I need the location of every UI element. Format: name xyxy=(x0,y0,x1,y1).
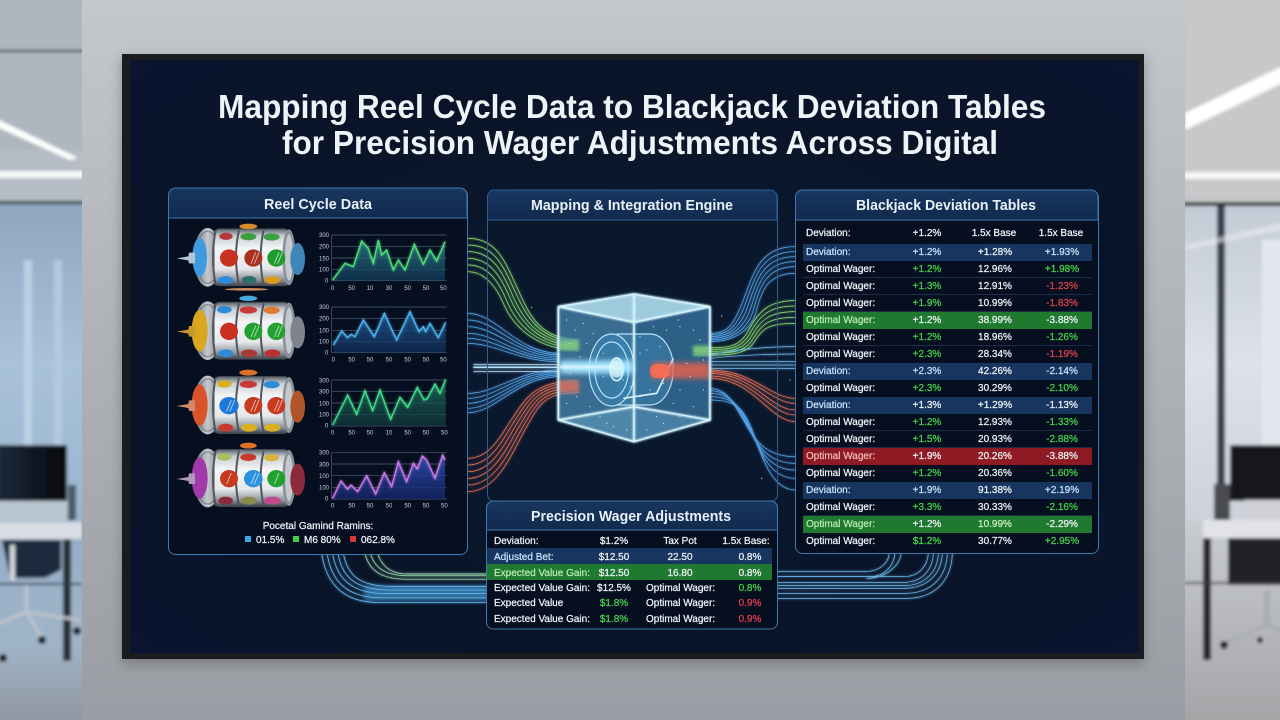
row 1: Deviation: xyxy=(806,247,850,258)
chart legend xyxy=(245,521,395,546)
row 6 xyxy=(806,332,1078,343)
panel: reel cycle data xyxy=(168,188,468,554)
row dividers xyxy=(803,278,1092,516)
row 10: -1.13% xyxy=(1046,400,1078,411)
panel: precision wager adjustments xyxy=(486,501,778,629)
panel: mapping and integration engine xyxy=(488,190,778,502)
line chart 4: 100 xyxy=(319,486,330,492)
title: Mapping Reel Cycle Data to Blackjack Deviation Tables xyxy=(218,88,1046,125)
row 8: Deviation: xyxy=(806,366,850,377)
adjustments header xyxy=(486,501,778,530)
row 12: 20.93% xyxy=(978,434,1012,445)
line chart 2: 50 xyxy=(404,358,412,364)
line chart 2: 200 xyxy=(319,316,330,322)
row 1 xyxy=(803,244,1092,261)
green connector left xyxy=(364,551,487,579)
row 13 highlighted red: -3.88% xyxy=(1046,451,1078,462)
line chart 4: 50 xyxy=(441,504,448,510)
line chart 1: 100 xyxy=(319,268,330,274)
row 11 xyxy=(806,417,1078,428)
chart legend: Pocetal Gamind Ramins: xyxy=(263,521,373,532)
blue inbound data bundle xyxy=(468,313,560,413)
row 4 xyxy=(806,298,1078,309)
line chart 3: 300 xyxy=(319,378,330,384)
line chart 1: 50 xyxy=(440,286,447,292)
adjusted bet row: $12.50 xyxy=(599,552,630,563)
panel: blackjack deviation tables xyxy=(796,190,1098,554)
adjustments column headings: Deviation: xyxy=(494,536,538,547)
line chart 3: 50 xyxy=(404,430,412,436)
adjusted bet row: 22.50 xyxy=(667,552,693,563)
row 12: +1.5% xyxy=(913,434,941,445)
line chart 4: 50 xyxy=(367,504,374,510)
row 3: +1.3% xyxy=(913,281,941,292)
row 5 highlighted green: Optimal Wager: xyxy=(806,315,875,326)
adjustments column headings xyxy=(494,536,770,547)
row 6: 18.96% xyxy=(978,332,1012,343)
row 12 xyxy=(806,434,1078,445)
icon: slot reel 3 xyxy=(177,370,305,434)
cylinder core xyxy=(589,334,673,406)
glow band behind connector xyxy=(364,586,487,601)
row 14: Optimal Wager: xyxy=(806,468,875,479)
energy beams xyxy=(558,341,710,393)
expected value row: Expected Value Gain: xyxy=(494,583,590,594)
line chart 1: 30 xyxy=(386,286,393,292)
row 16: -2.16% xyxy=(1046,502,1078,513)
line chart 4: 50 xyxy=(404,504,412,510)
central inbound beam xyxy=(473,364,560,372)
line chart 3 xyxy=(319,378,448,436)
line chart 2: 300 xyxy=(319,305,330,311)
title: for Precision Wager Adjustments Across Digital xyxy=(282,124,998,161)
row 11: -1.33% xyxy=(1046,417,1078,428)
row 10 xyxy=(803,397,1092,414)
expected value short row: $1.8% xyxy=(600,598,628,609)
row 7: +2.3% xyxy=(913,349,941,360)
row 2: Optimal Wager: xyxy=(806,264,875,275)
row 14: 20.36% xyxy=(978,468,1012,479)
line chart 4: 300 xyxy=(319,462,330,468)
row 11: +1.2% xyxy=(913,417,941,428)
expected value row: $12.5% xyxy=(597,583,631,594)
row 3: Optimal Wager: xyxy=(806,281,875,292)
line chart 3: 0 xyxy=(325,424,329,430)
chart legend: 062.8% xyxy=(361,535,395,546)
row 1: +1.28% xyxy=(978,247,1012,258)
line chart 3: 50 xyxy=(441,430,448,436)
row 12: Optimal Wager: xyxy=(806,434,875,445)
row 9: Optimal Wager: xyxy=(806,383,875,394)
line chart 4: 50 xyxy=(348,504,356,510)
row 3: -1.23% xyxy=(1046,281,1078,292)
row 13 highlighted red xyxy=(803,448,1092,465)
row 3 xyxy=(806,281,1078,292)
row 17 highlighted green: +1.2% xyxy=(913,519,941,530)
row 8: +2.3% xyxy=(913,366,941,377)
row 7 xyxy=(806,349,1078,360)
row 15: +1.9% xyxy=(913,485,941,496)
line chart 3: 50 xyxy=(348,430,356,436)
row 9 xyxy=(806,383,1078,394)
chart legend: 01.5% xyxy=(256,535,284,546)
row 18: +2.95% xyxy=(1045,536,1079,547)
expected value final row xyxy=(494,614,762,625)
bottom connector lines right xyxy=(777,553,952,598)
adjusted bet row: Adjusted Bet: xyxy=(494,552,553,563)
blue outbound top bundle xyxy=(710,247,795,342)
line chart 1 xyxy=(319,233,447,292)
cube faces xyxy=(558,294,710,442)
line chart 3: 100 xyxy=(319,413,330,419)
row 18: 30.77% xyxy=(978,536,1012,547)
green outbound bundle xyxy=(693,301,795,355)
line chart 1: 0 xyxy=(325,278,329,284)
line chart 3: 300 xyxy=(319,390,330,396)
row 4: 10.99% xyxy=(978,298,1012,309)
line chart 4: 100 xyxy=(319,474,330,480)
row 5 highlighted green xyxy=(803,312,1092,329)
red inbound data bundle xyxy=(468,381,578,492)
row 2: 12.96% xyxy=(978,264,1012,275)
table column headings xyxy=(806,228,1084,239)
row 13 highlighted red: Optimal Wager: xyxy=(806,451,875,462)
row 12: -2.88% xyxy=(1046,434,1078,445)
row 2 xyxy=(806,264,1079,275)
row 15: 91.38% xyxy=(978,485,1012,496)
line chart 2: 100 xyxy=(319,340,330,346)
row 2: +1.2% xyxy=(913,264,941,275)
line chart 1: 10 xyxy=(367,286,374,292)
row 9: 30.29% xyxy=(978,383,1012,394)
icon: slot reel 2 xyxy=(177,296,305,360)
line chart 3: 50 xyxy=(367,430,374,436)
line chart 4: 0 xyxy=(325,497,329,503)
expected value highlighted row: 16.80 xyxy=(667,568,693,579)
expected value final row: Expected Value Gain: xyxy=(494,614,590,625)
row 10: +1.3% xyxy=(913,400,941,411)
icon: glass cube engine xyxy=(532,294,790,478)
row 10: +1.29% xyxy=(978,400,1012,411)
expected value highlighted row: $12.50 xyxy=(599,568,630,579)
table column headings: 1.5x Base xyxy=(1039,228,1084,239)
line chart 3: 100 xyxy=(319,401,330,407)
expected value short row: Optimal Wager: xyxy=(646,598,715,609)
flow lines: reels to engine and engine to tables xyxy=(468,238,795,492)
row 18: $1.2% xyxy=(913,536,941,547)
line chart 1: 50 xyxy=(423,286,430,292)
row 16: 30.33% xyxy=(978,502,1012,513)
line chart 1: 0 xyxy=(331,286,335,292)
adjustments column headings: Tax Pot xyxy=(663,536,697,547)
row 10: Deviation: xyxy=(806,400,850,411)
blue connector left xyxy=(321,551,487,602)
line chart 1: 150 xyxy=(319,256,330,262)
expected value short row: Expected Value xyxy=(494,598,564,609)
line chart 1: 300 xyxy=(319,233,330,239)
adjusted bet row: 0.8% xyxy=(739,552,762,563)
line chart 4 xyxy=(319,450,448,510)
straight blue outbound lines xyxy=(710,347,795,368)
row 11: 12.93% xyxy=(978,417,1012,428)
row 7: -1.19% xyxy=(1046,349,1078,360)
row 5 highlighted green: +1.2% xyxy=(913,315,941,326)
blue outbound lower bundle xyxy=(710,388,795,490)
row 17 highlighted green xyxy=(803,516,1092,533)
row 8: 42.26% xyxy=(978,366,1012,377)
row 14: -1.60% xyxy=(1046,468,1078,479)
line chart 4: 300 xyxy=(319,450,330,456)
expected value row: 0.8% xyxy=(739,583,762,594)
icon: slot reel 1 xyxy=(177,224,305,291)
row 15: Deviation: xyxy=(806,485,850,496)
row 17 highlighted green: Optimal Wager: xyxy=(806,519,875,530)
expected value highlighted row xyxy=(487,564,772,580)
line chart 2: 50 xyxy=(386,358,393,364)
line chart 2: 50 xyxy=(367,358,374,364)
office background: left xyxy=(0,0,85,720)
cube glow xyxy=(558,294,710,442)
tables header xyxy=(796,190,1098,220)
expected value highlighted row: Expected Value Gain: xyxy=(494,568,590,579)
expected value short row xyxy=(494,598,762,609)
line chart 2 xyxy=(319,305,447,364)
table column headings: 1.5x Base xyxy=(972,228,1017,239)
table column headings: Deviation: xyxy=(806,228,850,239)
chart legend: M6 80% xyxy=(304,535,341,546)
row 17 highlighted green: -2.29% xyxy=(1046,519,1078,530)
cube edges xyxy=(558,294,710,442)
line chart 4: 0 xyxy=(331,504,335,510)
engine header xyxy=(488,190,777,220)
adjustments header: Precision Wager Adjustments xyxy=(531,508,731,525)
line chart 4: 50 xyxy=(386,504,393,510)
row 16: Optimal Wager: xyxy=(806,502,875,513)
row 7: Optimal Wager: xyxy=(806,349,875,360)
row 7: 28.34% xyxy=(978,349,1012,360)
line chart 1: 50 xyxy=(404,286,412,292)
row 5 highlighted green: 38.99% xyxy=(978,315,1012,326)
expected value final row: Optimal Wager: xyxy=(646,614,715,625)
row 6: +1.2% xyxy=(913,332,941,343)
row 9: -2.10% xyxy=(1046,383,1078,394)
line chart 3: 50 xyxy=(423,430,430,436)
row 14 xyxy=(806,468,1078,479)
line chart 1: 200 xyxy=(319,244,330,250)
row 3: 12.91% xyxy=(978,281,1012,292)
office background: right xyxy=(1183,0,1280,720)
bottom connector lines left xyxy=(321,551,487,602)
row 11: Optimal Wager: xyxy=(806,417,875,428)
row 13 highlighted red: 20.26% xyxy=(978,451,1012,462)
row 16 xyxy=(806,502,1078,513)
row 6: -1.26% xyxy=(1046,332,1078,343)
row 4: Optimal Wager: xyxy=(806,298,875,309)
row 9: +2.3% xyxy=(913,383,941,394)
row 8 xyxy=(803,363,1092,380)
expected value row xyxy=(494,583,762,594)
row 5 highlighted green: -3.88% xyxy=(1046,315,1078,326)
reel panel header: Reel Cycle Data xyxy=(264,196,373,213)
row 2: +1.98% xyxy=(1045,264,1079,275)
adjusted bet row xyxy=(487,548,772,564)
line chart 2: 0 xyxy=(325,351,329,357)
title xyxy=(218,88,1046,161)
tables header: Blackjack Deviation Tables xyxy=(856,197,1036,214)
line chart 2: 100 xyxy=(319,328,330,334)
row 18: Optimal Wager: xyxy=(806,536,875,547)
row 1: +1.2% xyxy=(913,247,941,258)
row 4: +1.9% xyxy=(913,298,941,309)
expected value final row: $1.8% xyxy=(600,614,628,625)
table column headings: +1.2% xyxy=(913,228,941,239)
row 4: -1.83% xyxy=(1046,298,1078,309)
row 18 xyxy=(806,536,1079,547)
line chart 4: 50 xyxy=(423,504,430,510)
expected value row: Optimal Wager: xyxy=(646,583,715,594)
line chart 2: 50 xyxy=(423,358,430,364)
engine header: Mapping & Integration Engine xyxy=(531,197,733,214)
green inbound data bundle xyxy=(468,238,578,350)
line chart 2: 50 xyxy=(348,358,356,364)
icon: slot reel 4 xyxy=(177,443,305,507)
expected value final row: 0.9% xyxy=(739,614,762,625)
adjustments column headings: 1.5x Base: xyxy=(722,536,770,547)
line chart 2: 50 xyxy=(440,358,447,364)
row 16: +3.3% xyxy=(913,502,941,513)
row 14: +1.2% xyxy=(913,468,941,479)
red outbound bundle xyxy=(710,370,795,422)
line chart 1: 50 xyxy=(348,286,356,292)
row 15: +2.19% xyxy=(1045,485,1079,496)
reel panel header xyxy=(168,188,467,218)
row 13 highlighted red: +1.9% xyxy=(913,451,941,462)
adjustments column headings: $1.2% xyxy=(600,536,628,547)
expected value short row: 0.9% xyxy=(739,598,762,609)
line chart 3: 10 xyxy=(386,430,393,436)
line chart 3: 0 xyxy=(331,430,335,436)
expected value highlighted row: 0.8% xyxy=(739,568,762,579)
line chart 2: 0 xyxy=(332,358,336,364)
row 6: Optimal Wager: xyxy=(806,332,875,343)
row 1: +1.93% xyxy=(1045,247,1079,258)
row 8: -2.14% xyxy=(1046,366,1078,377)
particles xyxy=(532,307,790,478)
row 17 highlighted green: 10.99% xyxy=(978,519,1012,530)
display screen frame xyxy=(122,54,1144,664)
row 15 xyxy=(803,482,1092,499)
